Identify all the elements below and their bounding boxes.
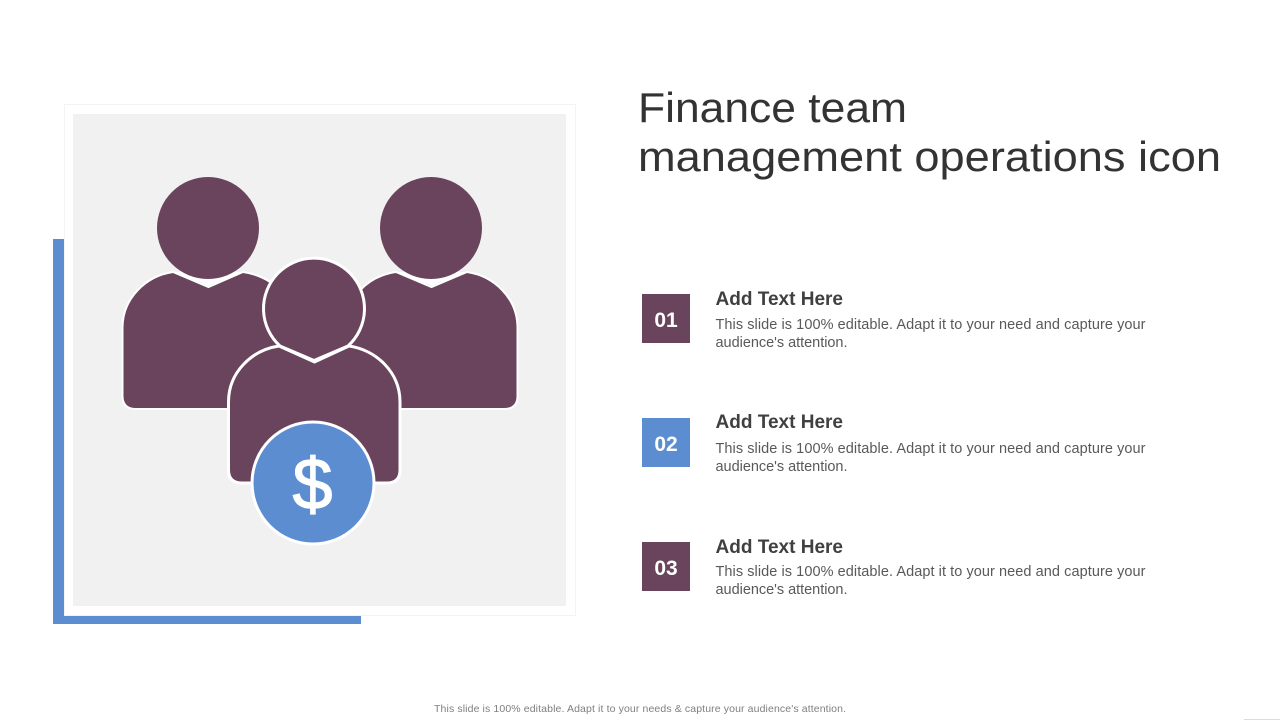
icon: dollar coin xyxy=(252,422,374,544)
panel: icon frame with blue offset accent xyxy=(53,104,576,624)
description 02 xyxy=(716,441,1146,475)
number badge 03 xyxy=(642,542,690,591)
description 03: audience's attention. xyxy=(716,582,848,598)
icon: finance team xyxy=(122,177,518,544)
title: management operations icon xyxy=(638,133,1221,180)
description 03 xyxy=(716,564,1146,598)
icon: centre person xyxy=(228,258,400,483)
heading 01: Add Text Here xyxy=(716,289,843,310)
corner accent line xyxy=(1244,719,1280,720)
title xyxy=(638,84,1221,180)
description 03: This slide is 100% editable. Adapt it to your need and capture your xyxy=(716,564,1146,580)
icon: left person xyxy=(122,177,295,409)
icon: dollar coin: $ xyxy=(292,445,333,525)
number badge 03: 03 xyxy=(654,557,678,580)
heading 02: Add Text Here xyxy=(716,412,843,433)
blue accent bar xyxy=(53,239,361,624)
number badge 01 xyxy=(642,294,690,343)
footer note: This slide is 100% editable. Adapt it to your needs & capture your audience's attention. xyxy=(434,703,846,715)
description 01: audience's attention. xyxy=(716,335,848,351)
description 01: This slide is 100% editable. Adapt it to your need and capture your xyxy=(716,317,1146,333)
number badge 01: 01 xyxy=(654,309,678,332)
list item 01 xyxy=(642,289,1146,351)
description 01 xyxy=(716,317,1146,351)
number badge 02: 02 xyxy=(654,433,678,456)
icon: right person xyxy=(345,177,518,409)
grey panel xyxy=(73,114,566,606)
white frame xyxy=(64,104,576,616)
description 02: This slide is 100% editable. Adapt it to your need and capture your xyxy=(716,441,1146,457)
list item 02 xyxy=(642,412,1146,475)
description 02: audience's attention. xyxy=(716,459,848,475)
list item 03 xyxy=(642,537,1146,598)
heading 03: Add Text Here xyxy=(716,537,843,558)
title: Finance team xyxy=(638,84,907,131)
number badge 02 xyxy=(642,418,690,467)
